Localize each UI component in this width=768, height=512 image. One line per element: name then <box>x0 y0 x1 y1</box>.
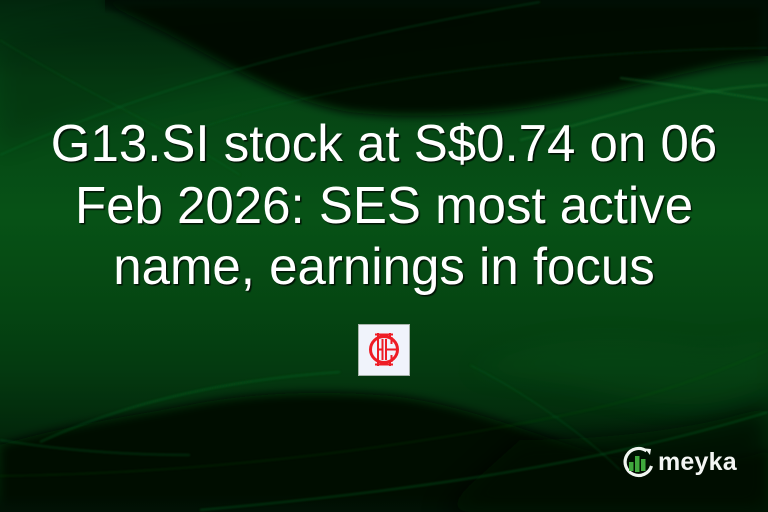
icon: meyka gauge with bars <box>623 446 653 478</box>
title: name, earnings in focus <box>113 238 655 296</box>
title: G13.SI stock at S$0.74 on 06 <box>51 115 717 173</box>
brand logo: meyka <box>623 446 737 478</box>
icon: company logo <box>358 324 410 376</box>
title: Feb 2026: SES most active <box>75 176 693 234</box>
wordmark: meyka <box>658 448 737 476</box>
title <box>51 115 717 297</box>
